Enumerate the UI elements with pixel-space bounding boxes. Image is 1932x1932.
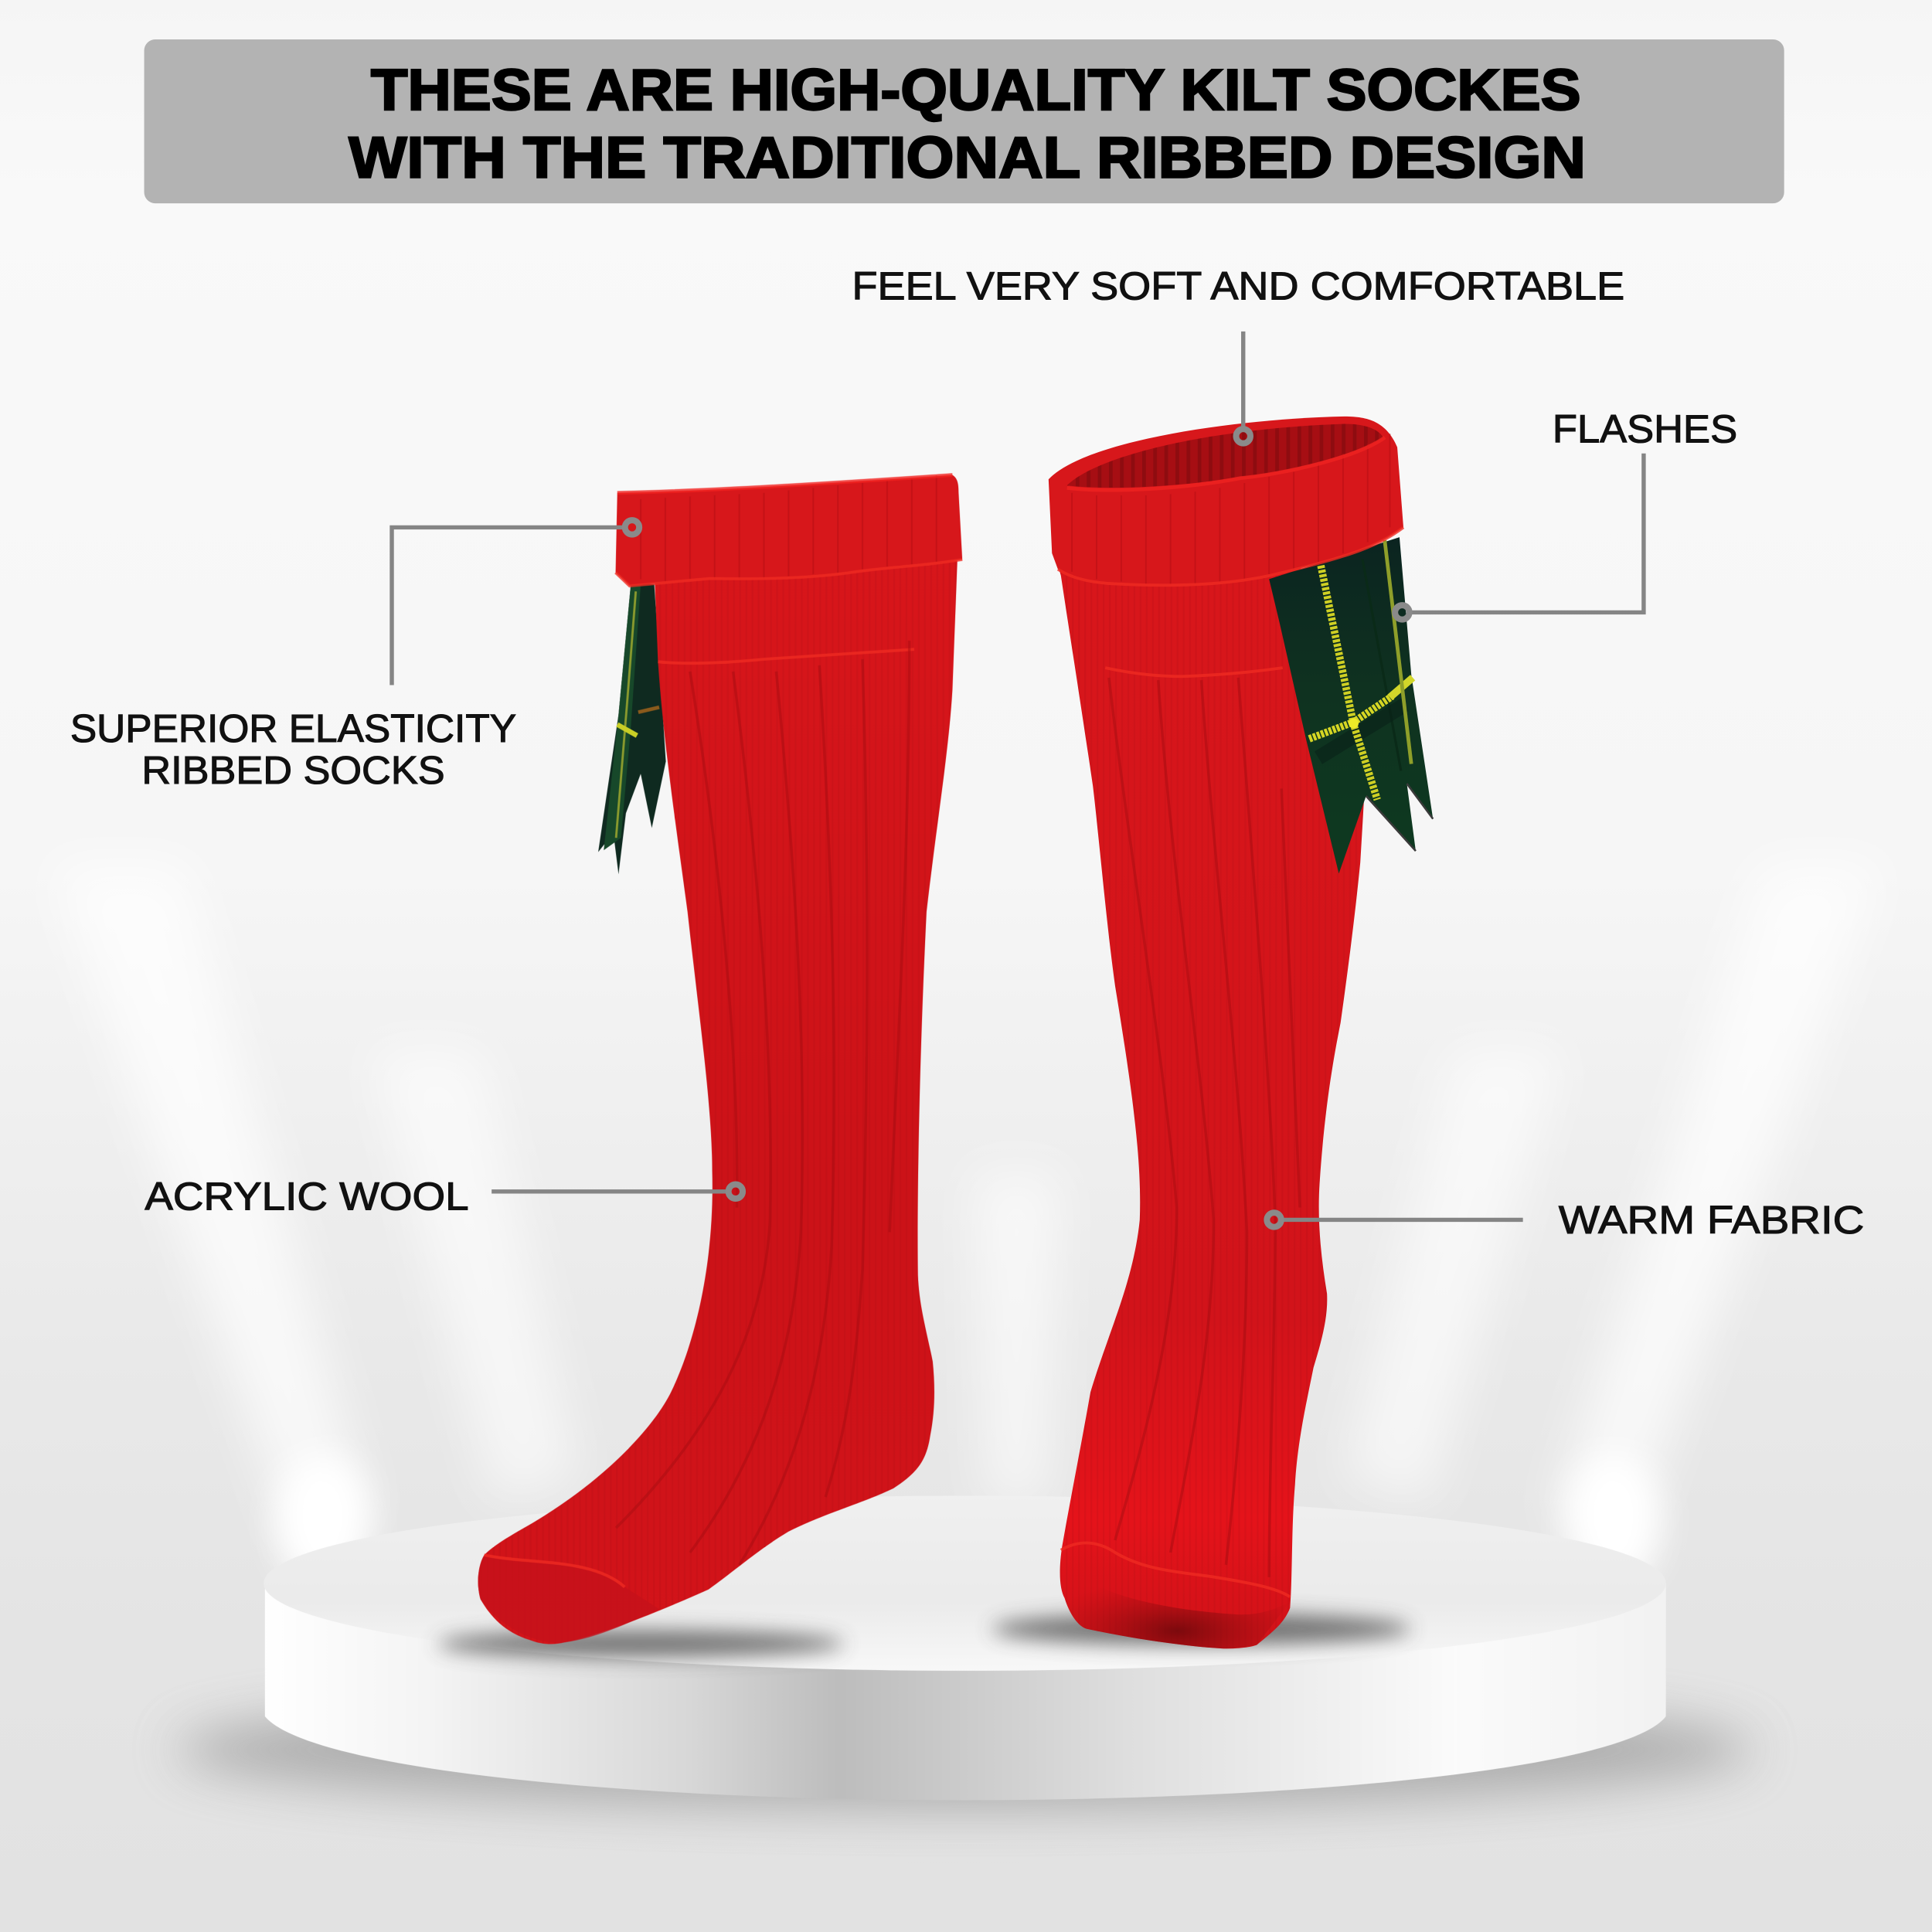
right sock [1049, 417, 1433, 1648]
left sock body [478, 560, 957, 1644]
right cuff [1049, 417, 1403, 585]
left flash [598, 584, 666, 874]
title banner: THESE ARE HIGH-QUALITY KILT SOCKES [371, 57, 1581, 122]
title banner [145, 39, 1784, 203]
left sock [478, 475, 962, 1644]
label: acrylic wool: ACRYLIC WOOL [145, 1175, 469, 1219]
label: acrylic wool [145, 1175, 743, 1219]
label: feel very soft and comfortable [852, 264, 1624, 444]
label: superior elasticity: RIBBED SOCKS [141, 748, 445, 792]
label: warm fabric [1267, 1198, 1864, 1242]
label: flashes: FLASHES [1553, 406, 1737, 451]
title banner: WITH THE TRADITIONAL RIBBED DESIGN [349, 125, 1586, 190]
label: feel very soft and comfortable: FEEL VERY SOFT AND COMFORTABLE [852, 264, 1624, 308]
label: superior elasticity [70, 520, 639, 792]
left cuff [616, 475, 962, 586]
right sock body [1055, 554, 1368, 1648]
podium [176, 1496, 1753, 1809]
right sock opening [1067, 423, 1383, 488]
label: warm fabric: WARM FABRIC [1559, 1198, 1864, 1242]
label: flashes [1395, 406, 1737, 620]
right flash [1269, 537, 1433, 873]
label: superior elasticity: SUPERIOR ELASTICITY [70, 706, 516, 750]
